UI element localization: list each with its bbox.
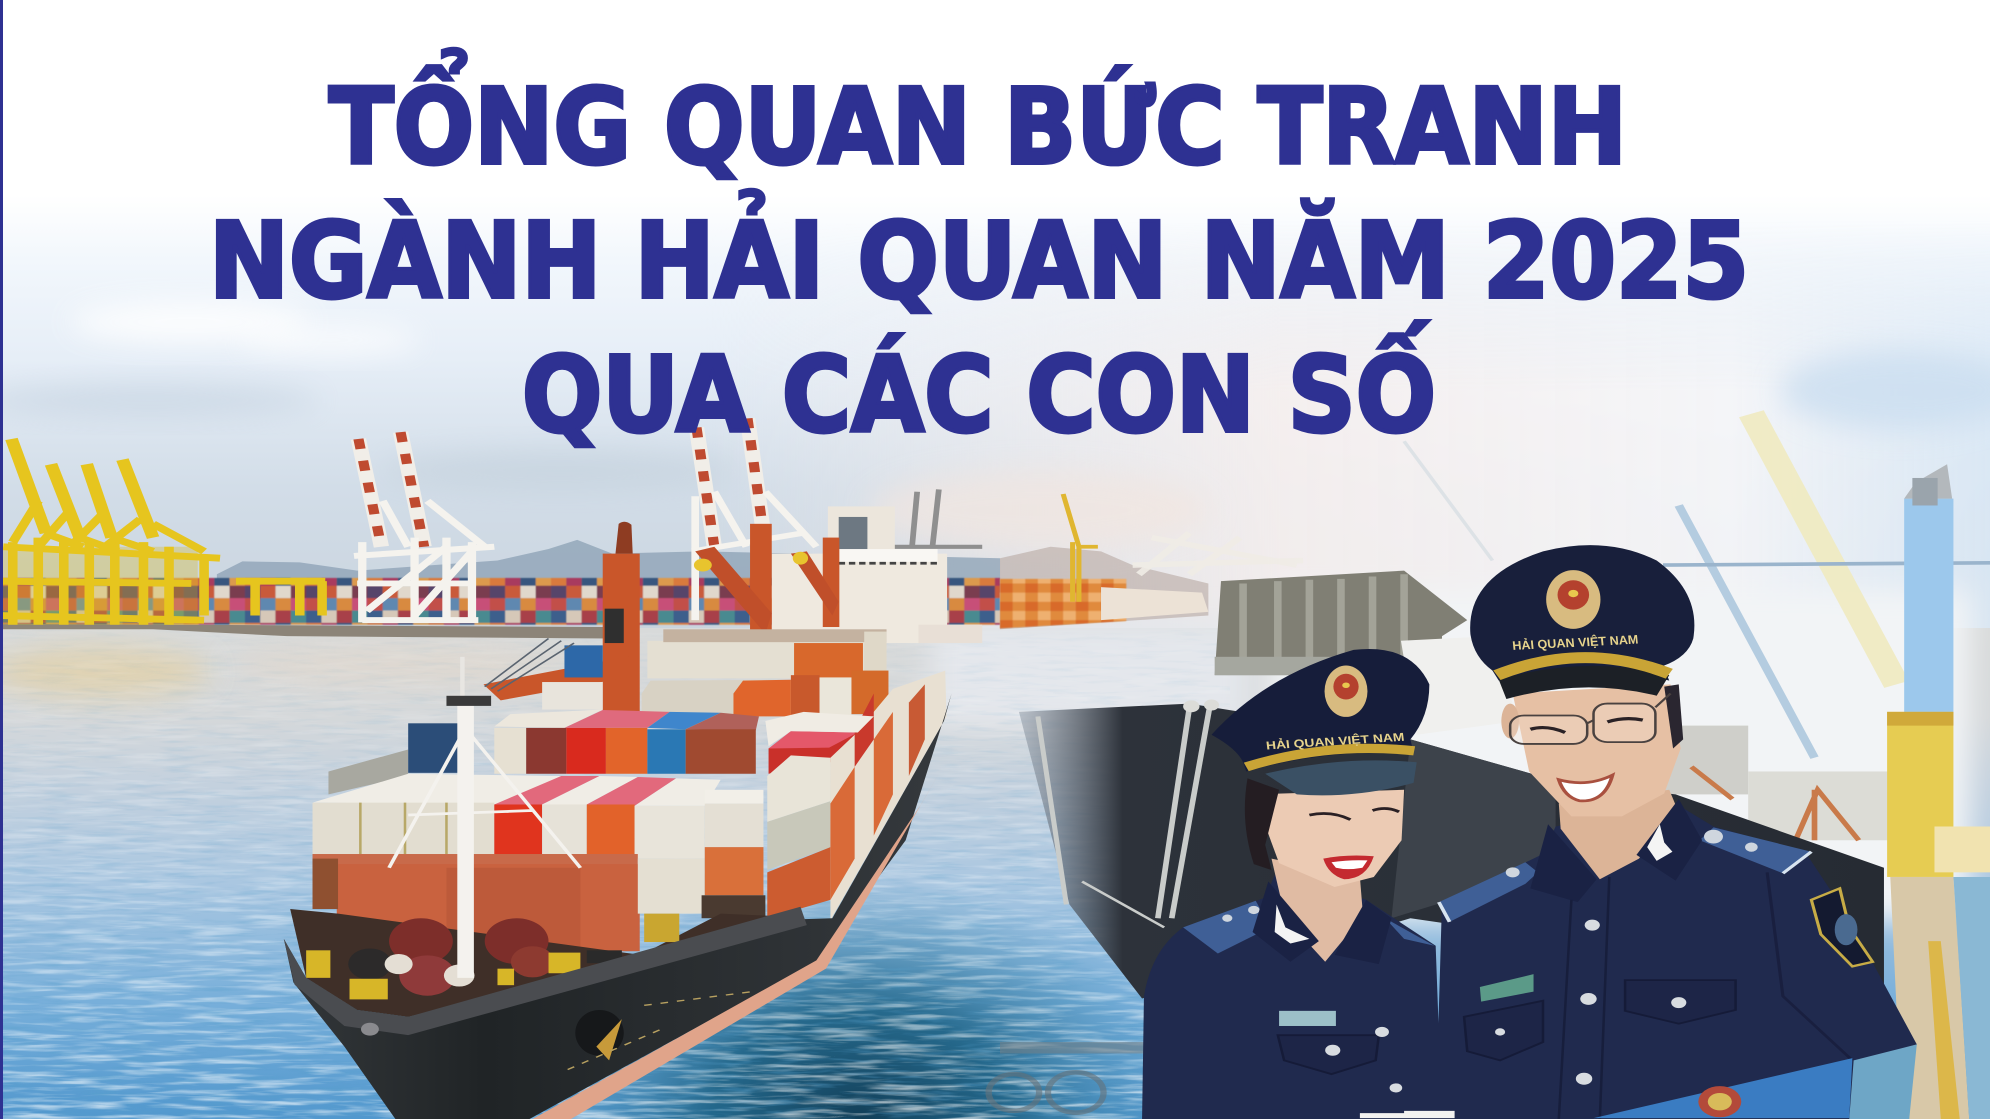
pale background behind officers	[1270, 590, 1970, 920]
female eyes	[1309, 808, 1399, 820]
male buttons	[1495, 920, 1686, 1085]
male shirt	[1436, 804, 1917, 1119]
mountains	[217, 540, 1000, 593]
male cap braid	[1497, 658, 1669, 675]
male pockets	[1464, 980, 1736, 1060]
female cap text: HẢI QUAN VIỆT NAM	[1265, 729, 1405, 752]
female officer	[1142, 649, 1455, 1119]
male eyes	[1530, 719, 1643, 732]
white paper	[1360, 1111, 1455, 1118]
female mouth	[1323, 856, 1374, 879]
white ship body	[1401, 636, 1518, 735]
male officer	[1436, 545, 1917, 1119]
yellow tower	[1887, 712, 1990, 1119]
left low stack	[328, 749, 408, 794]
receding side stacks	[830, 671, 946, 921]
distant port	[1000, 494, 1303, 629]
quay	[0, 624, 606, 638]
male name tag	[1480, 974, 1534, 1002]
water in front	[1953, 877, 1990, 1119]
male epaulets	[1439, 827, 1811, 922]
pale haze right of ship	[930, 620, 1250, 730]
customs officers	[1142, 545, 1917, 1119]
breakwater orange panel	[337, 864, 640, 951]
female hair	[1245, 778, 1279, 870]
ship hull	[284, 694, 952, 1119]
title line 3: QUA CÁC CON SỐ	[522, 321, 1436, 456]
male collar	[1530, 799, 1702, 902]
male glasses	[1510, 694, 1671, 744]
sleeve badge	[1811, 888, 1873, 966]
ship superstructure	[772, 506, 982, 643]
mid row fronts	[313, 803, 494, 855]
high stack tops	[494, 710, 603, 728]
distant grey cranes	[893, 489, 982, 547]
water ripples	[0, 630, 1230, 1119]
yellow gantry cranes	[0, 439, 325, 625]
container yard	[0, 578, 1000, 625]
title line 2: NGÀNH HẢI QUAN NĂM 2025	[209, 190, 1749, 322]
female collar	[1253, 882, 1391, 964]
lower right containers	[638, 859, 705, 914]
mid row tops	[313, 774, 561, 804]
water	[0, 590, 1990, 1119]
male placket	[1559, 877, 1609, 1119]
male cap	[1470, 545, 1694, 681]
ship mast and stays	[389, 638, 580, 978]
hull wedge shade	[1391, 739, 1556, 918]
female name tag	[1279, 1011, 1336, 1026]
female shirt	[1142, 868, 1442, 1119]
port and cargo ship	[0, 418, 1000, 1119]
wake	[530, 879, 1190, 1119]
male face	[1513, 684, 1681, 816]
female cap badge	[1325, 666, 1367, 717]
grey building	[1657, 726, 1893, 840]
pink boot stripe	[533, 774, 939, 1119]
female face	[1254, 790, 1404, 887]
deck machinery	[290, 909, 804, 1017]
back stack	[647, 641, 864, 678]
dark ship hull	[1019, 704, 1884, 998]
male hair	[1664, 684, 1683, 749]
trailer wheels	[989, 1042, 1145, 1113]
right stacks	[769, 732, 858, 774]
female cap	[1212, 649, 1429, 771]
male cap text: HẢI QUAN VIỆT NAM	[1512, 632, 1639, 653]
female epaulets	[1183, 901, 1434, 954]
ship ropes	[1038, 699, 1219, 927]
title	[209, 49, 1749, 456]
title line 1: TỔNG QUAN BỨC TRANH	[329, 49, 1627, 188]
gray hatch structure	[1215, 571, 1467, 675]
male ear	[1501, 704, 1519, 738]
male visor	[1499, 666, 1669, 699]
left edge border	[0, 0, 3, 1119]
female buttons	[1325, 1027, 1402, 1092]
male cap badge	[1546, 570, 1600, 629]
background behind officers	[989, 414, 1990, 1119]
orange deck cranes	[483, 522, 839, 712]
blue document	[1594, 1058, 1852, 1118]
stacked containers	[313, 629, 946, 951]
high stack fronts	[494, 728, 526, 774]
male mouth	[1559, 775, 1612, 801]
female pockets	[1278, 1035, 1379, 1074]
male sleeve seam	[1767, 872, 1852, 1060]
faint booms	[1404, 414, 1990, 758]
blue tower	[1904, 464, 1953, 714]
bulwark	[284, 907, 807, 1035]
white and red cranes left	[354, 432, 494, 622]
female visor	[1265, 760, 1417, 795]
anchor and hull marks	[361, 992, 753, 1070]
female cap braid	[1246, 748, 1414, 767]
white and red cranes right	[692, 418, 816, 620]
sky background	[3, 228, 1990, 628]
female neck	[1272, 859, 1363, 962]
male neck	[1559, 790, 1677, 879]
